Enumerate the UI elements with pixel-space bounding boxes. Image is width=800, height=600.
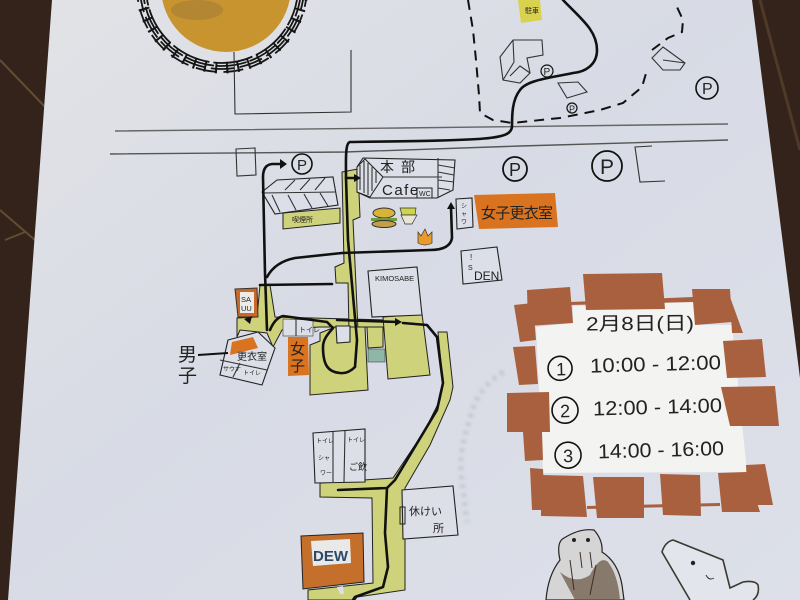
schedule card: [536, 302, 747, 473]
shower box: ワ: [461, 219, 467, 226]
label: women: 女: [290, 341, 305, 358]
rest area: 休けい: [409, 505, 442, 518]
icon: fire: [418, 229, 432, 245]
schedule date: 2月8日(日): [586, 314, 694, 335]
main building labels: [380, 159, 432, 199]
upper site: yellow sign: [518, 0, 542, 23]
DEN box: [461, 247, 502, 284]
small toilet box: トイレ: [299, 327, 320, 334]
rest area: 所: [433, 521, 444, 535]
schedule row 2: 12:00 - 14:00: [593, 395, 722, 420]
schedule row 1: 1: [556, 359, 566, 379]
main building: [357, 158, 455, 198]
parking boxes: [236, 146, 665, 182]
schedule row 3: [555, 438, 724, 468]
dashed boundary right: [652, 7, 683, 50]
men's changing room: サウナ: [223, 365, 241, 373]
empty plot under moon: [234, 50, 351, 114]
parking markers: [292, 65, 718, 181]
icon: burger: [371, 208, 397, 228]
label: men: [178, 345, 228, 387]
shower box: シ: [461, 204, 467, 210]
parking markers: P: [544, 67, 550, 78]
icon: fries: [400, 208, 417, 224]
DEW building: DEW: [313, 548, 349, 565]
parking markers: P: [702, 81, 713, 98]
toilet and shower block: トイレ: [316, 439, 334, 445]
label: women's changing room: [474, 193, 558, 229]
toilet and shower block: ご飲: [349, 461, 367, 472]
parking markers: P: [600, 156, 614, 179]
KIMOSABE box: [368, 267, 422, 317]
smudge marks: [461, 372, 503, 522]
label: women: [288, 337, 309, 376]
men's changing room: トイレ: [243, 371, 261, 377]
label: men: 子: [178, 366, 197, 387]
toilet and shower block: [313, 429, 367, 483]
KIMOSABE box: KIMOSABE: [375, 274, 414, 283]
left building: [262, 177, 338, 214]
sauna box: [235, 288, 258, 317]
DEN box: DEN: [474, 269, 499, 283]
toilet and shower block: シャ: [318, 456, 330, 462]
small white box: [336, 326, 350, 343]
dashed boundary: [468, 0, 647, 123]
men's changing room: 更衣室: [237, 351, 267, 363]
sauna box: SA: [241, 295, 251, 304]
men's changing room: [220, 332, 275, 385]
label: women: 子: [290, 358, 305, 375]
illustration: brown bear: [546, 530, 624, 600]
small toilet box: [283, 319, 320, 336]
schedule row 2: [552, 393, 722, 424]
main building labels: WC: [419, 191, 431, 198]
yellow walkways: [237, 169, 453, 600]
rest area: [400, 486, 458, 539]
schedule row 3: 14:00 - 16:00: [598, 438, 724, 463]
parking markers: P: [569, 104, 575, 114]
teal block: [368, 349, 385, 362]
schedule row 1: 10:00 - 12:00: [590, 352, 721, 378]
toilet and shower block: ワー: [320, 470, 332, 477]
road lines: [110, 124, 728, 154]
label: men: 男: [178, 345, 197, 366]
upper site: yellow sign: 駐車: [525, 6, 539, 15]
main building labels: 本部: [380, 159, 422, 175]
sauna box: UU: [241, 304, 252, 313]
shower box: ャ: [461, 212, 467, 218]
building label: 喫煙所: [292, 215, 313, 224]
schedule row 1: [548, 352, 721, 381]
main building labels: Cafe: [382, 182, 420, 199]
toilet and shower block: トイレ: [347, 438, 365, 444]
DEN box: S: [468, 265, 473, 272]
illustration: white bear: [662, 540, 758, 600]
upper site: buildings: [500, 40, 685, 98]
shower box: [456, 198, 473, 229]
schedule masking tape: [507, 273, 779, 518]
parking markers: P: [509, 160, 521, 180]
moon illustration: [137, 0, 307, 72]
black route: [244, 0, 597, 600]
label: women's changing room: 女子更衣室: [481, 205, 553, 222]
DEW building: [301, 533, 364, 589]
schedule row 2: 2: [560, 401, 570, 421]
parking markers: P: [297, 157, 307, 174]
schedule row 3: 3: [563, 446, 573, 466]
DEN box: !: [470, 253, 472, 262]
